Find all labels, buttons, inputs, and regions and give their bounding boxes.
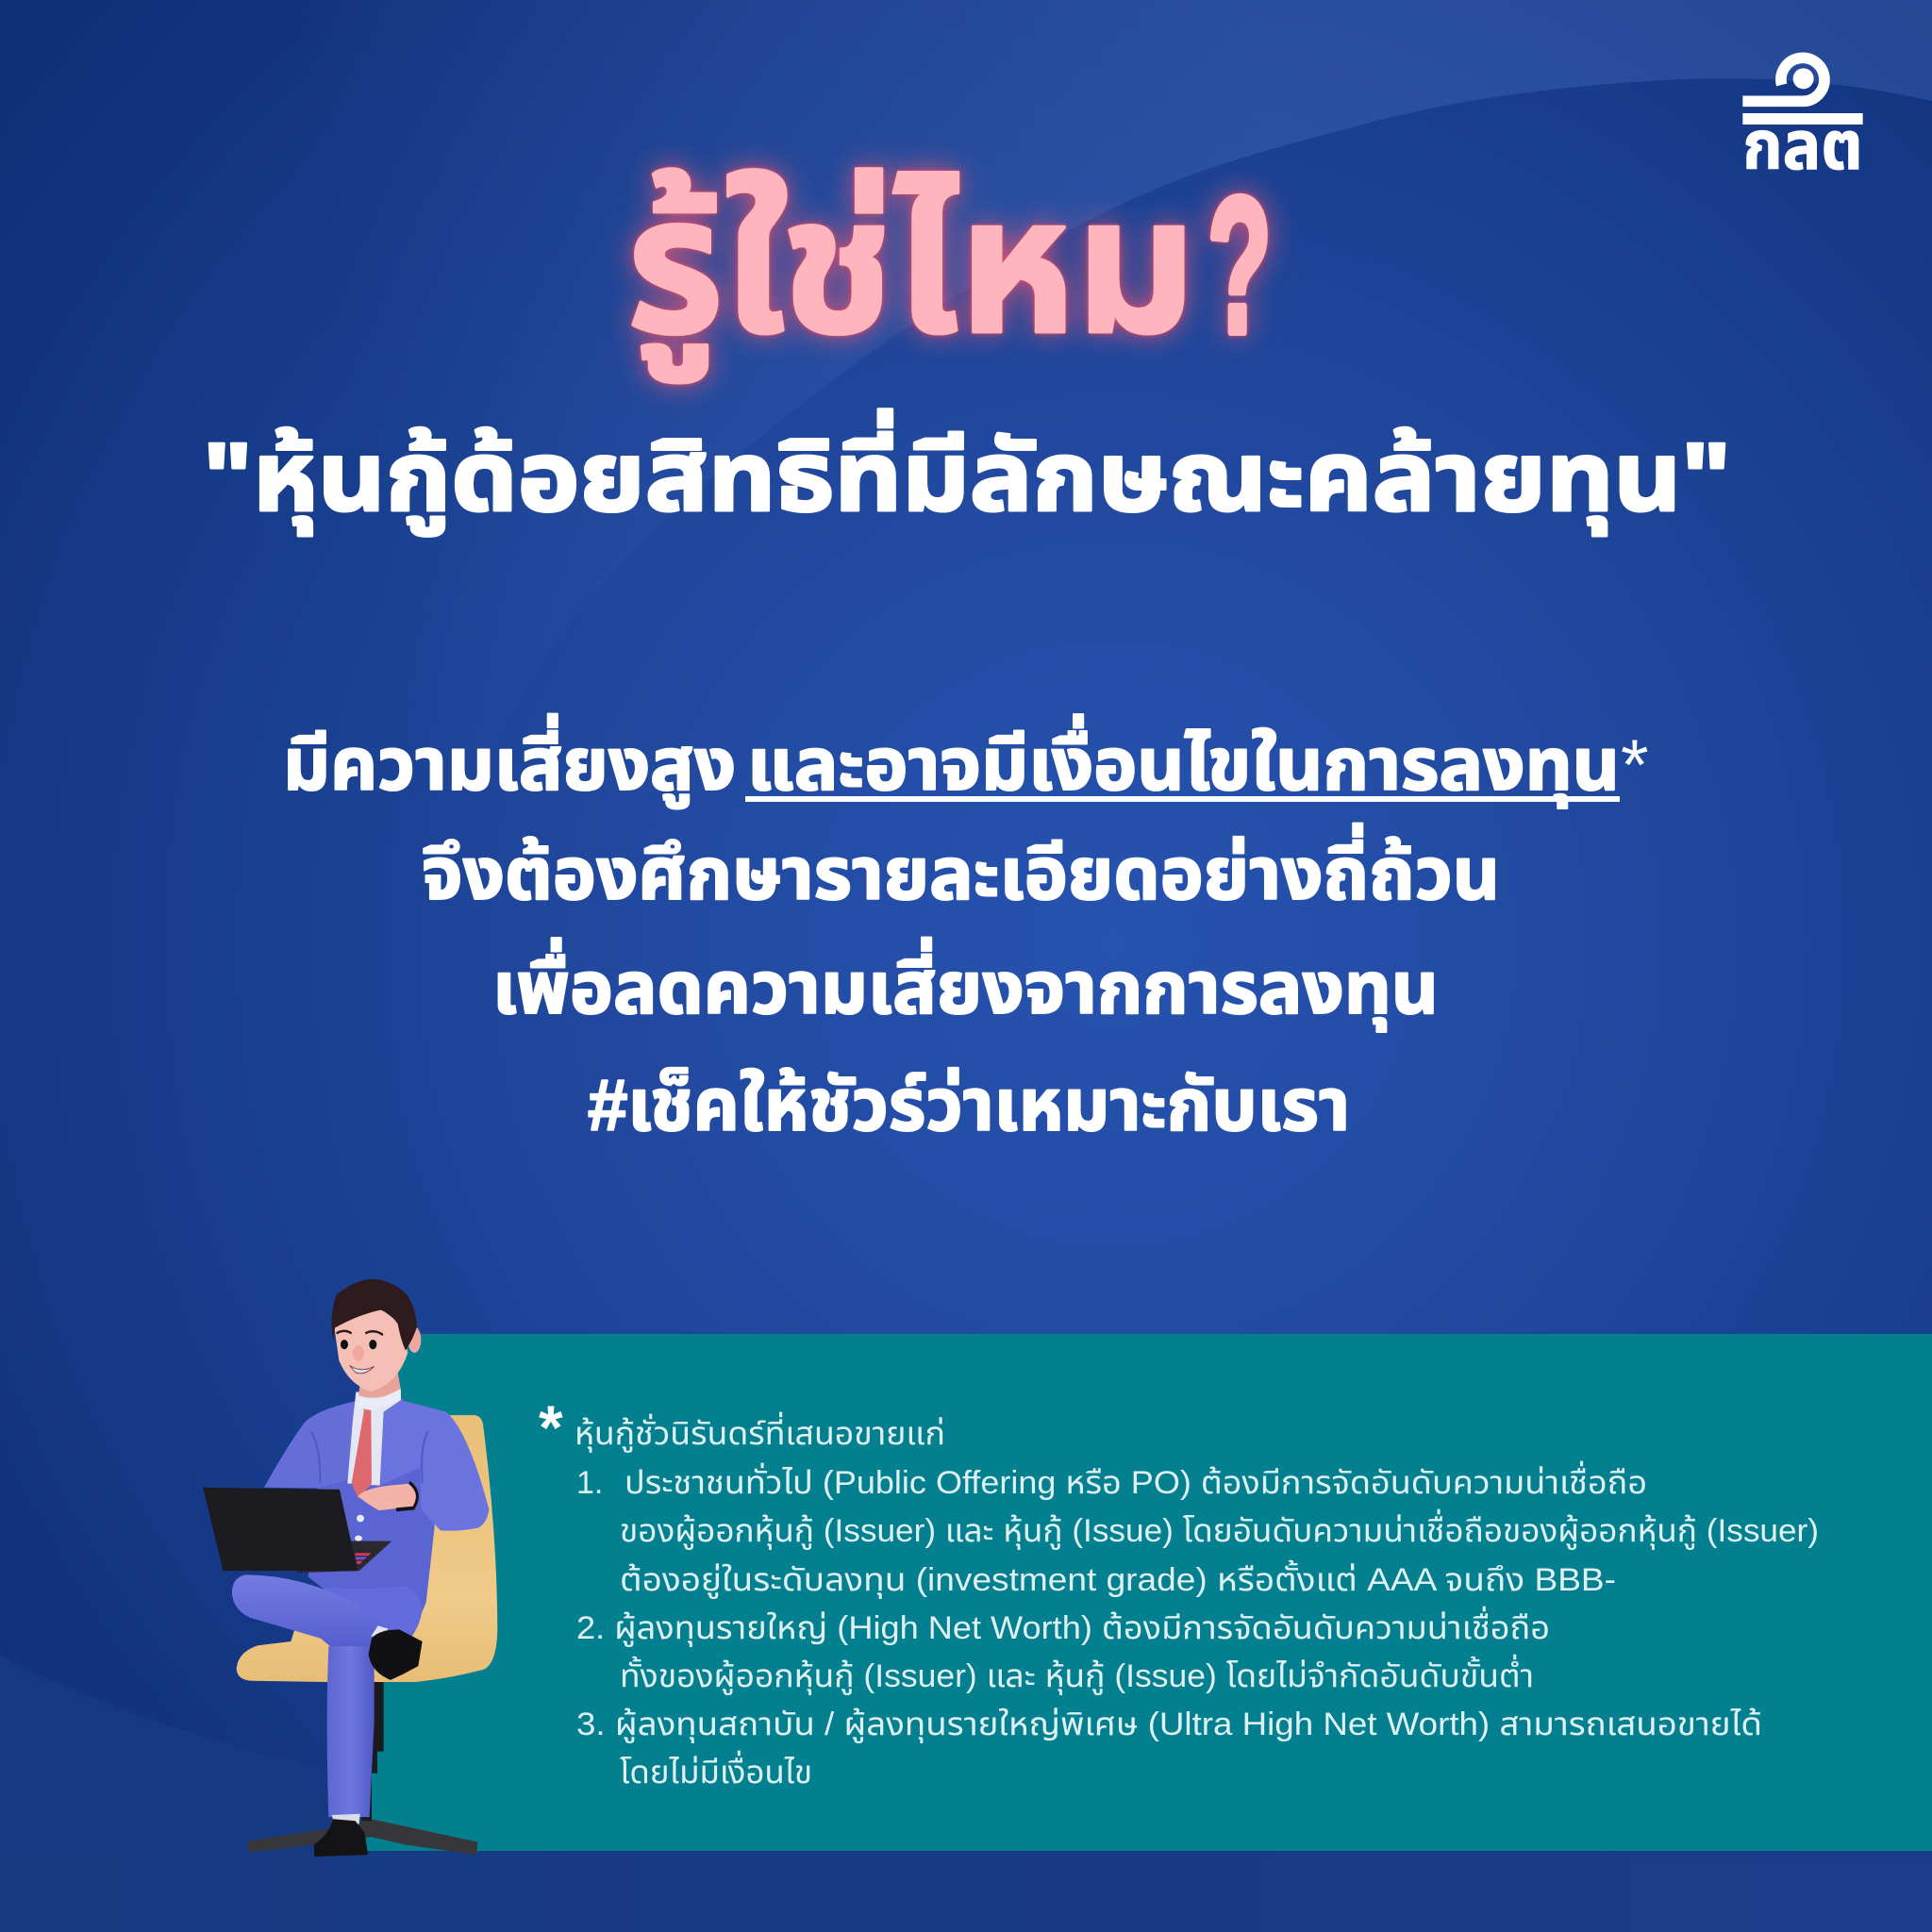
line 1: มีความเสี่ยงสูง <box>283 714 736 808</box>
shirt <box>347 1389 401 1486</box>
item 2: ทั้งของผู้ออกหุ้นกู้ (Issuer) และ หุ้นกู้ (Issue) โดยไม่จำกัดอันดับขั้นต่ำ <box>620 1654 1534 1695</box>
item 3: โดยไม่มีเงื่อนไข <box>620 1750 812 1790</box>
logo mark: spiral <box>1742 58 1863 125</box>
logo wordmark: กลต <box>1742 108 1863 184</box>
panel: footnote <box>363 1334 1932 1851</box>
eyes and brows <box>337 1331 383 1349</box>
logo <box>1742 58 1863 184</box>
line 1: * <box>1621 725 1649 806</box>
item 1: 1. <box>576 1465 603 1501</box>
smile <box>350 1366 375 1374</box>
laptop keys <box>355 1553 371 1564</box>
tie <box>352 1400 375 1499</box>
footnote heading: หุ้นกู้ชั่วนิรันดร์ที่เสนอขายแก่ <box>575 1411 945 1453</box>
lower shoe <box>314 1819 368 1857</box>
left arm <box>264 1401 357 1489</box>
buttons <box>355 1515 364 1541</box>
lower leg <box>327 1642 375 1817</box>
item 3 <box>576 1707 1762 1790</box>
item 2 <box>576 1606 1550 1695</box>
hair <box>331 1279 417 1351</box>
line 2: จึงต้องศึกษารายละเอียดอย่างถี่ถ้วน <box>422 824 1500 915</box>
chair base and stem <box>248 1678 478 1855</box>
item 1: ประชาชนทั่วไป (Public Offering หรือ PO) ต้องมีการจัดอันดับความน่าเชื่อถือ <box>625 1460 1647 1501</box>
line 1: และอาจมีเงื่อนไขในการลงทุน <box>747 714 1620 808</box>
upper shoe <box>369 1629 423 1680</box>
thigh <box>232 1574 384 1646</box>
figure <box>203 1279 489 1857</box>
title: ? <box>1208 158 1272 374</box>
item 2: 2. ผู้ลงทุนรายใหญ่ (High Net Worth) ต้องมีการจัดอันดับความน่าเชื่อถือ <box>576 1606 1550 1647</box>
line 3: เพื่อลดความเสี่ยงจากการลงทุน <box>492 938 1439 1032</box>
item 1: ต้องอยู่ในระดับลงทุน (investment grade) หรือตั้งแต่ AAA จนถึง BBB- <box>620 1559 1616 1599</box>
title: รู้ใช่ไหม <box>626 158 1196 383</box>
watch <box>396 1482 417 1509</box>
item 1 <box>576 1460 1819 1599</box>
nose <box>353 1345 364 1361</box>
collar <box>356 1389 401 1410</box>
torso <box>308 1398 435 1637</box>
line 1 <box>283 714 1649 808</box>
upper sock <box>371 1625 389 1637</box>
laptop screen <box>203 1488 358 1571</box>
main message <box>283 714 1649 1146</box>
neck <box>358 1373 401 1398</box>
hip <box>321 1586 422 1637</box>
right arm crease <box>422 1432 427 1484</box>
subtitle: "หุ้นกู้ด้อยสิทธิที่มีลักษณะคล้ายทุน" <box>203 409 1731 536</box>
left arm crease <box>311 1432 320 1484</box>
laptop base <box>295 1541 391 1573</box>
item 3: 3. ผู้ลงทุนสถาบัน / ผู้ลงทุนรายใหญ่พิเศษ (Ultra High Net Worth) สามารถเสนอขายได้ <box>576 1707 1762 1743</box>
jacket and right arm <box>380 1400 489 1531</box>
head <box>334 1308 408 1391</box>
line 4: #เช็คให้ชัวร์ว่าเหมาะกับเรา <box>588 1065 1350 1146</box>
lower sock <box>332 1814 360 1824</box>
ear <box>408 1326 421 1353</box>
asterisk: * <box>539 1392 563 1462</box>
illustration: businessman with laptop on chair <box>203 1279 497 1857</box>
chair <box>237 1415 497 1682</box>
item 1: ของผู้ออกหุ้นกู้ (Issuer) และ หุ้นกู้ (Issue) โดยอันดับความน่าเชื่อถือของผู้ออกหุ้นกู้ (Issuer) <box>620 1508 1819 1550</box>
hand <box>358 1484 416 1510</box>
